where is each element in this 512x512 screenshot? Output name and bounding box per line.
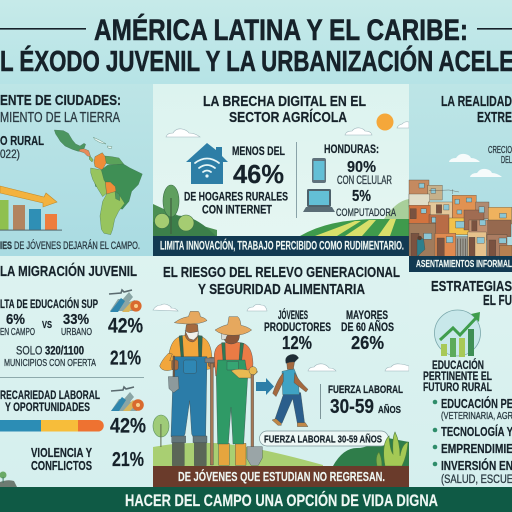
banner: asentamientos informales [409,256,512,272]
text: rural 2022 [0,133,44,161]
icon: small tree [0,472,17,487]
heading: continente de ciudades: MIENTO DE LA TIERRA [0,109,120,126]
text: precariedad laboral: Y OPORTUNIDADES [5,400,90,414]
stat: 90% con celular [337,159,392,187]
heading: migración juvenil: LA MIGRACIÓN JUVENIL [0,262,137,280]
heading: estrategias [431,278,512,309]
heading: continente de ciudades [0,92,121,126]
illustration: bush [376,432,408,466]
text: falta de educación superior: LTA DE EDUCACIÓN SUP [0,298,98,311]
bar chart: declining rural population [0,186,62,231]
icon: small tree [153,415,169,447]
illustration: informal settlement [409,180,512,257]
banner: limita innovación [153,236,409,256]
stat: 90% con celular: CON CELULAR [337,175,392,187]
stat: jóvenes productores 12% [264,309,331,353]
text: violencia y conflictos [31,446,93,473]
header background [0,0,512,84]
stat: mayores de 60 años 26%: DE 60 AÑOS [341,321,394,334]
heading: continente de ciudades: ENTE DE CIUDADES: [0,92,121,109]
stat: 90% con celular: 90% [347,159,376,176]
stat: mayores de 60 años 26%: MAYORES [346,310,388,322]
stat: 33% urbano [61,312,92,338]
progress bar [0,420,104,432]
illustration: young man walking [272,354,308,427]
stat: 5% computadora: COMPUTADORA [336,207,396,219]
text: rural 2022: O RURAL [0,133,44,148]
stat: 33% urbano: 33% [63,312,89,328]
stat: 33% urbano: URBANO [61,326,92,338]
stat: 5% computadora: 5% [352,188,371,205]
arrow: downward trend [0,186,57,207]
stat: fuerza laboral 30-59 años: AÑOS [378,403,401,416]
text: jóvenes dejarán el campo: IES DE JÓVENES DEJARÁN EL CAMPO. [0,239,140,252]
icon: migration tools [109,290,142,312]
stat: 46% hogares con internet: DE HOGARES RURALES [184,190,288,204]
banner: jóvenes no regresan: DE JÓVENES QUE ESTUDIAN NO REGRESAN. [178,469,385,484]
stat: 6% en campo: 6% [6,312,25,328]
text: precariedad laboral: RECARIEDAD LABORAL [0,388,100,402]
text: 320/1100 municipios [4,344,96,369]
pill label: fuerza laboral [260,431,388,446]
stat: 21%: 21% [110,348,141,370]
heading: la realidad [441,93,512,126]
panel: migración juvenil [0,256,153,487]
text: crecimiento [488,145,512,166]
stat: 6% en campo [0,312,35,338]
panel: estrategias [409,272,512,487]
text: violencia y conflictos: CONFLICTOS [31,459,92,473]
clouds [153,304,409,371]
stat: 46% hogares con internet: 46% [233,159,284,189]
stat: fuerza laboral 30-59 años: 30-59 [330,396,374,418]
stat: jóvenes productores 12%: 12% [282,333,312,353]
icon: phone [312,158,326,183]
heading: brecha digital: SECTOR AGRÍCOLA [229,109,347,126]
text: vs: VS [42,320,52,331]
heading: brecha digital: LA BRECHA DIGITAL EN EL [203,93,366,110]
text: Honduras: HONDURAS: [324,144,379,156]
arrow: generational handover [256,378,274,395]
stat: fuerza laboral 30-59 años [328,384,403,418]
panel: la realidad extrema [409,84,512,272]
text: educación pertinente: EDUCACIÓN [432,359,484,372]
stat: jóvenes productores 12%: JÓVENES [278,309,308,322]
clouds [449,154,502,177]
stat: 46% hogares con internet [184,144,288,216]
map: Latin America [54,130,142,235]
stat: 46% hogares con internet: CON INTERNET [202,202,273,216]
heading: brecha digital [203,93,366,126]
man farmer [160,311,216,466]
stat: 5% computadora [336,188,396,219]
text: 320/1100 municipios: MUNICIPIOS CON OFERTA [4,357,96,369]
ground [153,436,409,468]
panel: brecha digital [153,84,409,256]
stat: 42%: 42% [108,314,143,338]
text: educación pertinente: PERTINENTE EL [423,371,492,383]
text: educación pertinente [423,359,492,394]
trees and hills [153,185,409,236]
illustration: elderly farmers [160,311,262,466]
text: violencia y conflictos: VIOLENCIA Y [31,446,93,460]
pill label: fuerza laboral: FUERZA LABORAL 30-59 AÑOS [264,432,382,446]
stat: mayores de 60 años 26%: 26% [351,333,384,353]
heading: relevo generacional: EL RIESGO DEL RELEVO GENERACIONAL [163,264,400,281]
stat: mayores de 60 años 26% [341,310,394,353]
footer banner [0,487,512,512]
text: rural 2022: 022) [0,147,20,161]
decorative clouds and sun [166,114,409,137]
icon: house with wifi [186,143,228,184]
text: educación pertinente: FUTURO RURAL [423,382,492,394]
panel: continente de ciudades [0,84,153,256]
icon: growth chart [434,310,480,357]
heading: relevo generacional [163,264,400,298]
banner: jóvenes no regresan [153,466,409,487]
icon: labor tools [111,387,144,411]
text: 320/1100 municipios: SOLO 320/1100 [16,344,84,358]
stat: 42% precariedad: 42% [110,414,146,438]
heading: relevo generacional: Y SEGURIDAD ALIMENTARIA [198,281,365,298]
stat: 21% violencia: 21% [112,449,144,471]
panel: relevo generacional [153,256,409,487]
stat: jóvenes productores 12%: PRODUCTORES [264,322,331,334]
title [0,13,512,78]
woman farmer [214,317,262,465]
stat: 6% en campo: EN CAMPO [0,326,35,338]
text: precariedad laboral [0,388,100,414]
icon: laptop [303,189,335,212]
stat: 46% hogares con internet: MENOS DEL [232,144,285,158]
list: estrategias [433,396,512,486]
stat: fuerza laboral 30-59 años: FUERZA LABORAL [328,384,403,396]
